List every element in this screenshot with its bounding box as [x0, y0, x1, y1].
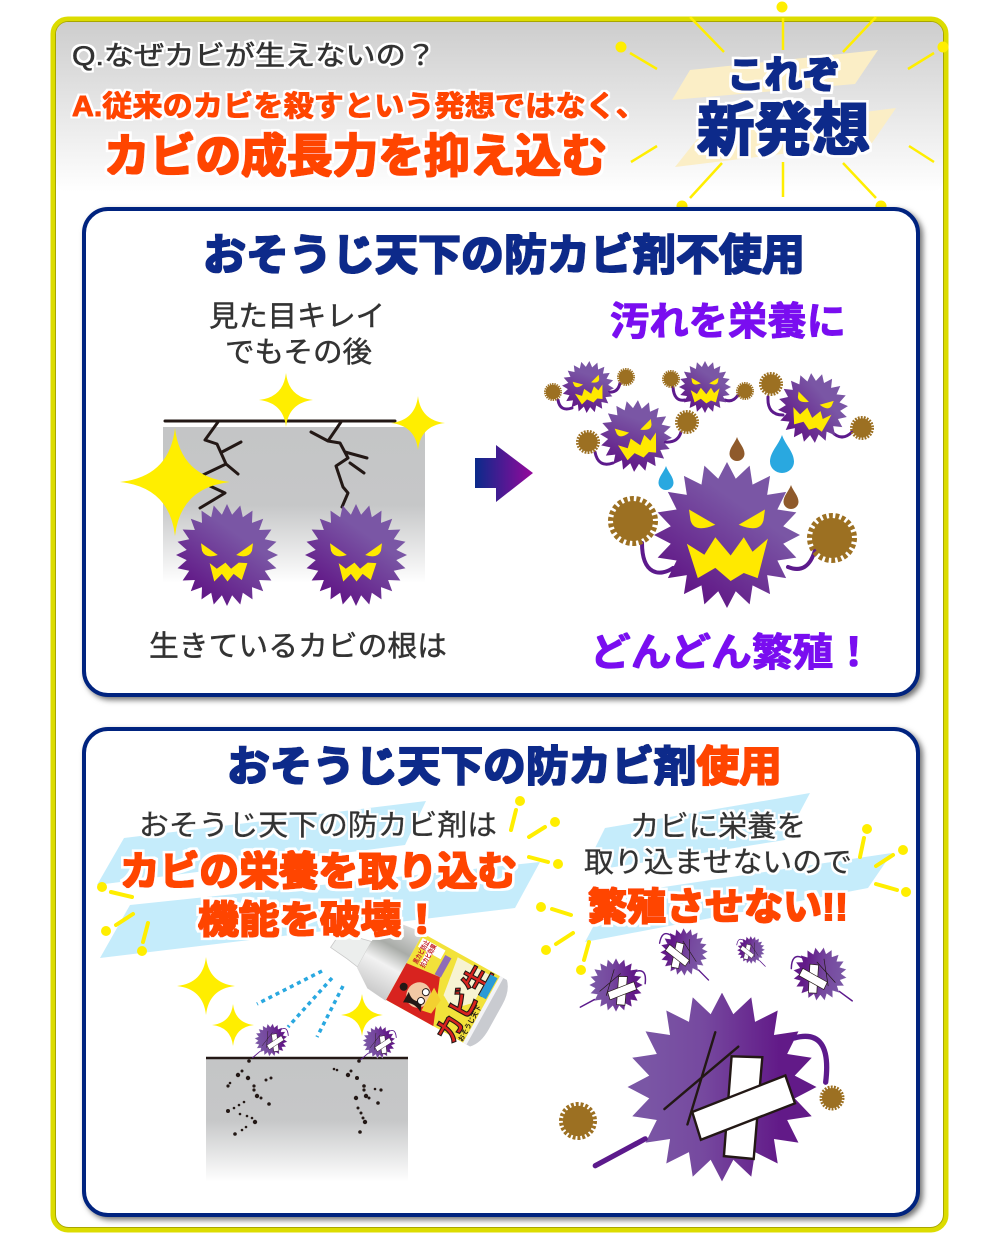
bottle label: 抗カビ効果: [418, 942, 438, 969]
badge: new idea: これぞ: [727, 55, 840, 97]
text: dirt as nutrient: 汚れを栄養に: [610, 301, 846, 344]
text: looks clean: でもその後: [225, 336, 372, 369]
heading: answer emphasis: カビの成長力を抑え込む: [104, 130, 607, 182]
panel: with anti-mold agent: [84, 729, 918, 1215]
text: looks clean: [209, 301, 385, 369]
illustration: multiplying mold: [545, 355, 872, 608]
text: no multiplication: [584, 810, 852, 929]
illustration: wall with roots: [120, 373, 445, 606]
spray droplets: [257, 971, 343, 1037]
bottle label: おそうじ天下: [456, 1004, 483, 1043]
text: looks clean: 見た目キレイ: [209, 301, 385, 333]
heading: answer line: A.従来のカビを殺すという発想ではなく、: [72, 90, 646, 123]
badge: new idea: 新発想: [697, 98, 870, 163]
illustration: wall with broken roots: [177, 957, 408, 1182]
bottle label: [382, 933, 501, 1050]
illustration: disabled molds: [561, 921, 859, 1183]
heading: question: Q.なぜカビが生えないの？: [72, 41, 436, 71]
brush background: left: [97, 801, 540, 958]
bottle shoulder: [350, 913, 423, 1001]
panel: without anti-mold agent: [84, 209, 918, 695]
text: agent description: 機能を破壊！: [198, 900, 442, 942]
text: no multiplication: 繁殖させない!!: [588, 887, 848, 929]
brush background: right: [583, 793, 892, 942]
text: agent description: カビの栄養を取り込む: [120, 850, 517, 894]
bottle label: カビ生: [429, 960, 499, 1049]
bottle cap: [329, 926, 372, 967]
arrow: [475, 445, 533, 502]
bottle label: 黒カビ防止: [411, 938, 431, 965]
text: agent description: [120, 809, 517, 942]
text: no multiplication: 取り込ませないので: [584, 847, 852, 879]
text: no multiplication: カビに栄養を: [630, 810, 806, 843]
panel heading: おそうじ天下の防カビ剤使用: [227, 743, 782, 790]
panel heading: おそうじ天下の防カビ剤不使用: [203, 232, 805, 280]
text: living roots: 生きているカビの根は: [149, 630, 447, 663]
product bottle: [317, 897, 514, 1057]
sparkle dashes: [97, 796, 911, 975]
text: agent description: おそうじ天下の防カビ剤は: [139, 809, 497, 842]
text: keeps multiplying: どんどん繁殖！: [590, 632, 874, 675]
badge: new idea: [616, 2, 948, 212]
